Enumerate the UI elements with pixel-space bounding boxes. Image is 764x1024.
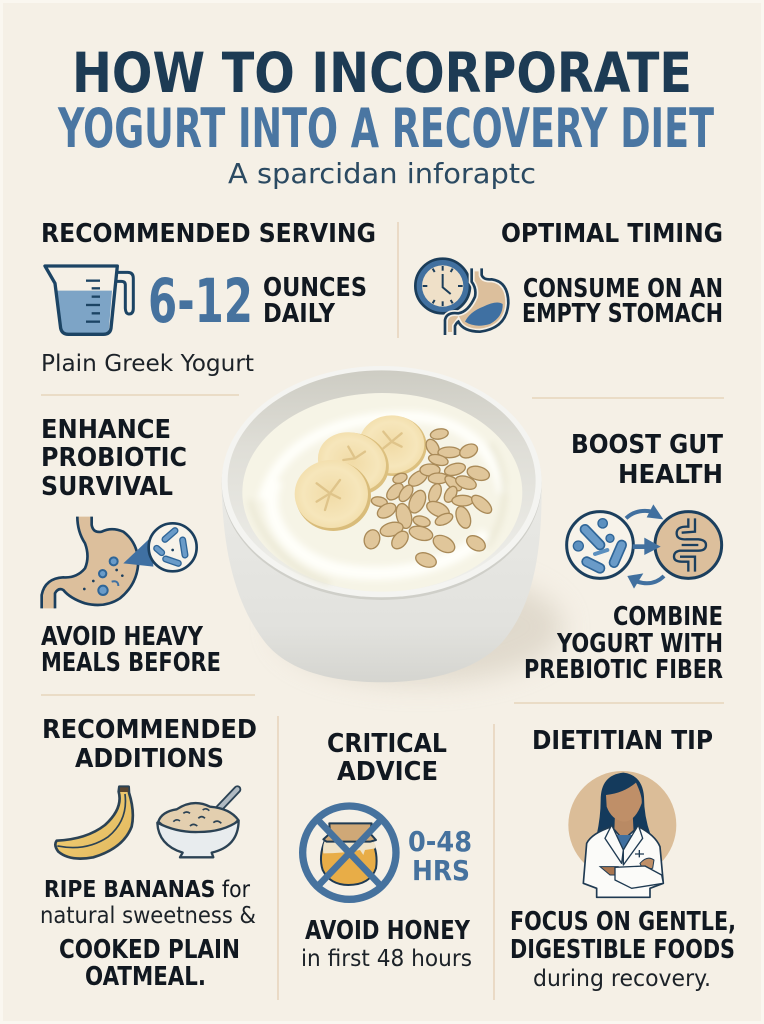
tagline: A sparcidan inforaptc [228, 157, 536, 190]
heading: boost gut health: BOOST GUT [571, 430, 723, 460]
body text: combine prebiotic fiber [524, 602, 723, 685]
time window: HRS [412, 854, 470, 887]
serving unit: OUNCES [263, 273, 367, 303]
body text: avoid honey: AVOID HONEY [305, 916, 471, 946]
icon: no honey jar [303, 806, 396, 899]
panel: dietitian tip [510, 726, 736, 992]
serving unit [263, 273, 367, 329]
body text: combine prebiotic fiber: COMBINE [613, 602, 723, 632]
panel: optimal timing [415, 219, 723, 335]
heading: critical advice [327, 729, 447, 787]
icon: probiotics to gut [567, 504, 722, 589]
heading: critical advice: ADVICE [337, 757, 438, 787]
heading: critical advice: CRITICAL [327, 729, 447, 759]
title [57, 41, 714, 160]
heading: boost gut health: HEALTH [618, 460, 723, 490]
panel: enhance probiotic survival [41, 415, 221, 678]
body text: avoid honey: in first 48 hours [301, 944, 472, 972]
serving amount: 6-12 [148, 266, 253, 337]
heading: recommended additions: RECOMMENDED [42, 715, 257, 745]
icon: measuring cup [45, 266, 133, 334]
body text: gentle foods [510, 907, 736, 992]
icon: oatmeal bowl [157, 789, 239, 857]
heading: enhance probiotic survival: ENHANCE [41, 415, 171, 445]
serving note: Plain Greek Yogurt [41, 349, 254, 377]
panel: recommended additions [40, 715, 257, 992]
heading: recommended serving: RECOMMENDED SERVING [41, 219, 376, 249]
heading: dietitian tip: DIETITIAN TIP [532, 726, 713, 756]
body text: timing [522, 274, 723, 329]
body text: ripe bananas and oatmeal: OATMEAL. [85, 962, 206, 992]
heading: enhance probiotic survival: SURVIVAL [41, 472, 173, 502]
banana slices [295, 415, 427, 531]
body text: ripe bananas and oatmeal: natural sweetness & [40, 901, 256, 929]
dividers [41, 222, 724, 1000]
heading: optimal timing: OPTIMAL TIMING [501, 219, 723, 249]
body text: gentle foods: during recovery. [533, 964, 711, 992]
body text: avoid honey [301, 916, 472, 972]
panel: recommended serving [41, 219, 376, 377]
oats [362, 428, 495, 570]
body text: avoid heavy meals: AVOID HEAVY [41, 622, 204, 652]
icon: banana [55, 787, 133, 859]
panel: critical advice [301, 729, 472, 972]
panel: boost gut health [524, 430, 723, 685]
heading: enhance probiotic survival: PROBIOTIC [41, 443, 187, 473]
body text: ripe bananas and oatmeal: RIPE BANANAS for [44, 877, 250, 903]
time window [408, 825, 472, 887]
body text: ripe bananas and oatmeal [40, 877, 256, 992]
icon: stomach with probiotics [42, 517, 197, 608]
heading: recommended additions [42, 715, 257, 774]
heading: boost gut health [571, 430, 723, 490]
yogurt bowl photo [222, 366, 563, 683]
icon: dietitian [568, 771, 676, 897]
heading: enhance probiotic survival [41, 415, 187, 502]
body text: ripe bananas and oatmeal: COOKED PLAIN [59, 935, 240, 965]
heading: recommended additions: ADDITIONS [75, 744, 224, 774]
serving unit: DAILY [263, 299, 336, 329]
icon: clock and stomach [415, 259, 508, 335]
body text: combine prebiotic fiber: YOGURT WITH [556, 629, 723, 659]
body text: avoid heavy meals [41, 622, 221, 678]
body text: avoid heavy meals: MEALS BEFORE [41, 648, 221, 678]
time window: 0-48 [408, 825, 472, 858]
